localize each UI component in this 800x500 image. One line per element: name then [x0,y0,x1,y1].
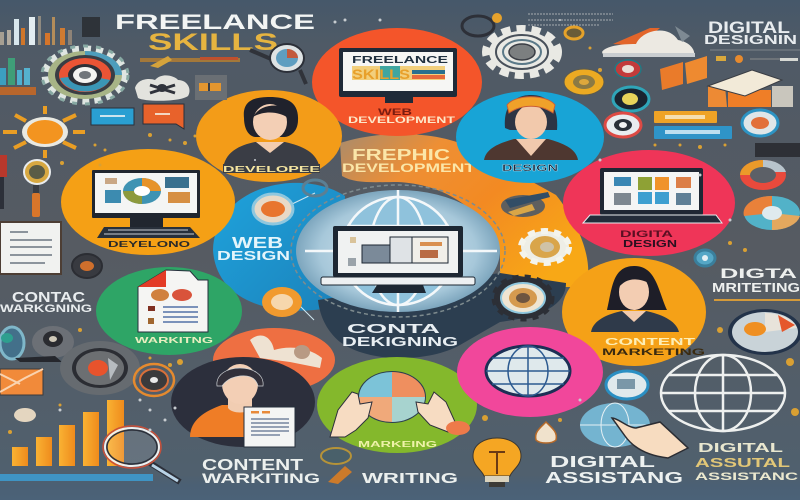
icon: white gear in center right [521,231,569,263]
label: digital assistance: ASSUTAL [695,455,790,470]
icon: left magnifier [24,160,50,217]
label: frephic development [342,147,476,175]
label: contact marketing [0,289,92,315]
panel: development monitor circle [61,149,235,255]
panel: digital design laptop circle [563,150,735,256]
panel: content marketing person circle [562,258,706,366]
person: developer [223,97,320,170]
central label: conta designing [342,321,458,349]
icon: top magnifier [250,44,306,84]
icon: pie dial [744,196,800,230]
icon: right hand [416,392,456,432]
label: digital assistang: DIGITAL [550,454,655,471]
icon: small rings left [0,326,74,362]
label: MARKEING [358,440,437,449]
icon: small globe badge [606,371,648,399]
icon: progress marks [716,55,798,63]
icon: red tool [0,155,7,209]
label: contact marketing: WARKGNING [0,303,92,315]
icon: monitor with donut chart [92,170,200,238]
panel: content person dark circle [171,357,315,447]
web development label: DEVELOPMENT [348,115,456,125]
light confetti marks [58,18,732,432]
icon: freelance monitor [339,48,457,103]
title [115,11,315,56]
design label: DESIGN [502,163,558,173]
label: digital assistance [695,440,798,483]
icon: target top right badge [695,250,715,266]
label: writing: WRITING [362,470,458,487]
background big blue circle: web design [213,183,345,330]
divider strip [710,49,800,51]
icon: blue badge with connector [253,180,327,320]
label: digita design: DIGITA [620,229,674,239]
central navy circle with globe and monitor [291,185,566,358]
label: web design: DESIGN [217,248,290,263]
monitor subtitle: SKILLS [352,66,410,82]
icon: small pumpkin [14,408,36,422]
central label: conta designing: DEKIGNING [342,334,458,349]
icon: orange flag panels [660,56,707,90]
icon: document with charts [138,270,208,332]
icon: cloud emblem [135,75,190,101]
icon: paint tool [501,192,550,217]
panel: developer person circle [196,90,342,182]
icon: speech bubble orange [143,104,184,129]
panel: web development circle [312,28,482,136]
icon: dark gear in center [494,277,552,319]
label: digital designing [704,18,797,47]
bar chart [12,400,124,466]
icon: blue globe with pointing hand [580,403,688,458]
icon: ring yellow [564,69,604,95]
icon: laptop [583,168,722,223]
central label: conta designing: CONTA [347,321,441,336]
web development label: WEB [378,107,413,117]
icon: wrist band [446,421,470,435]
icon: speech bubble blue [91,108,134,125]
developer label [223,164,321,174]
panel: coral circle with craft shapes [213,328,335,392]
icon: top spiral gear [486,29,558,75]
icon: tile globe [359,372,425,422]
title: SKILLS [148,29,278,56]
icon: ring red [615,60,641,78]
label: content marketing bottom: CONTENT [202,457,303,474]
strip: blue caption bar [0,474,153,481]
icon: orange envelope [0,369,43,395]
label: web design [217,235,290,263]
label: digital designing: DESIGNIN [704,32,797,47]
icon: large magnifier [103,426,180,482]
label: web design: WEB [232,235,283,252]
panel: design person circle [456,91,604,183]
label: frephic development: DEVELOPMENT [342,161,476,175]
developer label: DEVELOPEE [223,165,321,174]
label: contact marketing: CONTAC [12,289,85,306]
label: digital assistang [545,454,683,487]
small ring [565,27,583,39]
icon: barcode [755,143,800,157]
bar strip top left [0,16,100,45]
label: MARKETING [602,347,705,357]
icon: target disc [60,341,140,395]
icon: dark gear ring left [72,254,102,278]
label: WARKITNG [135,335,214,345]
background big orange circle: graphic development [340,134,588,287]
icon: big target gear [42,46,128,104]
label: digital assistang: ASSISTANG [545,470,683,487]
panel: magenta globe circle [457,327,603,417]
icon: central monitor [321,226,475,293]
label: frephic development: FREPHIC [352,147,451,164]
icon: flame drop [536,422,556,443]
label: content marketing bottom [202,457,320,486]
icon: gauge [728,309,800,355]
dotted text lines [528,14,613,25]
label: CONTENT [605,337,695,348]
label: content marketing bottom: WARKITING [202,470,320,486]
panel: lime marketing circle with hands [317,357,477,453]
label: digital designing: DIGITAL [708,18,790,37]
icon: sun [3,106,85,158]
label bar blue [654,126,732,139]
icon: line globe [661,355,785,431]
label: digita design: DESIGN [623,239,677,250]
panel: marketing document circle [96,267,242,355]
icon: light bulb [473,438,521,487]
title: FREELANCE [115,11,315,34]
icon: central globe [305,190,497,312]
icon: ring teal [613,87,649,111]
confetti marks [8,46,799,434]
icon: donut chart [740,160,786,190]
person: designer [484,95,578,160]
icon: left hand [330,392,372,437]
icon: cloud with orange roof [602,26,695,57]
icon: dark ring top [462,13,502,36]
label: digital assistance: ASSISTANC [695,471,798,483]
person: writer [190,364,295,447]
label: digital writing: DIGTA [720,265,797,281]
divider [714,299,800,301]
tools strip [140,56,240,68]
icon: orange badge [262,287,302,317]
label [602,337,705,357]
icon: small pen mark [321,448,352,484]
icon: open envelope [708,70,793,107]
label: digital writing: MRITETING [712,280,800,295]
label bar orange [654,111,717,123]
document [244,407,295,447]
icon: storage box [195,75,227,100]
icon: ring red white [605,113,641,137]
icon: concentric orange ring [134,364,174,396]
monitor title: FREELANCE [352,55,448,66]
icon: globe [486,346,570,396]
chart small left [0,58,36,95]
label: digital writing [712,265,800,295]
icon: text document left [0,222,61,274]
icon: ring blue with cloud [742,110,778,136]
label: digita design [620,229,677,250]
person: woman with long hair [591,266,679,332]
label: DEYELONO [108,240,190,249]
label: digital assistance: DIGITAL [698,440,783,455]
web development label [348,107,456,125]
